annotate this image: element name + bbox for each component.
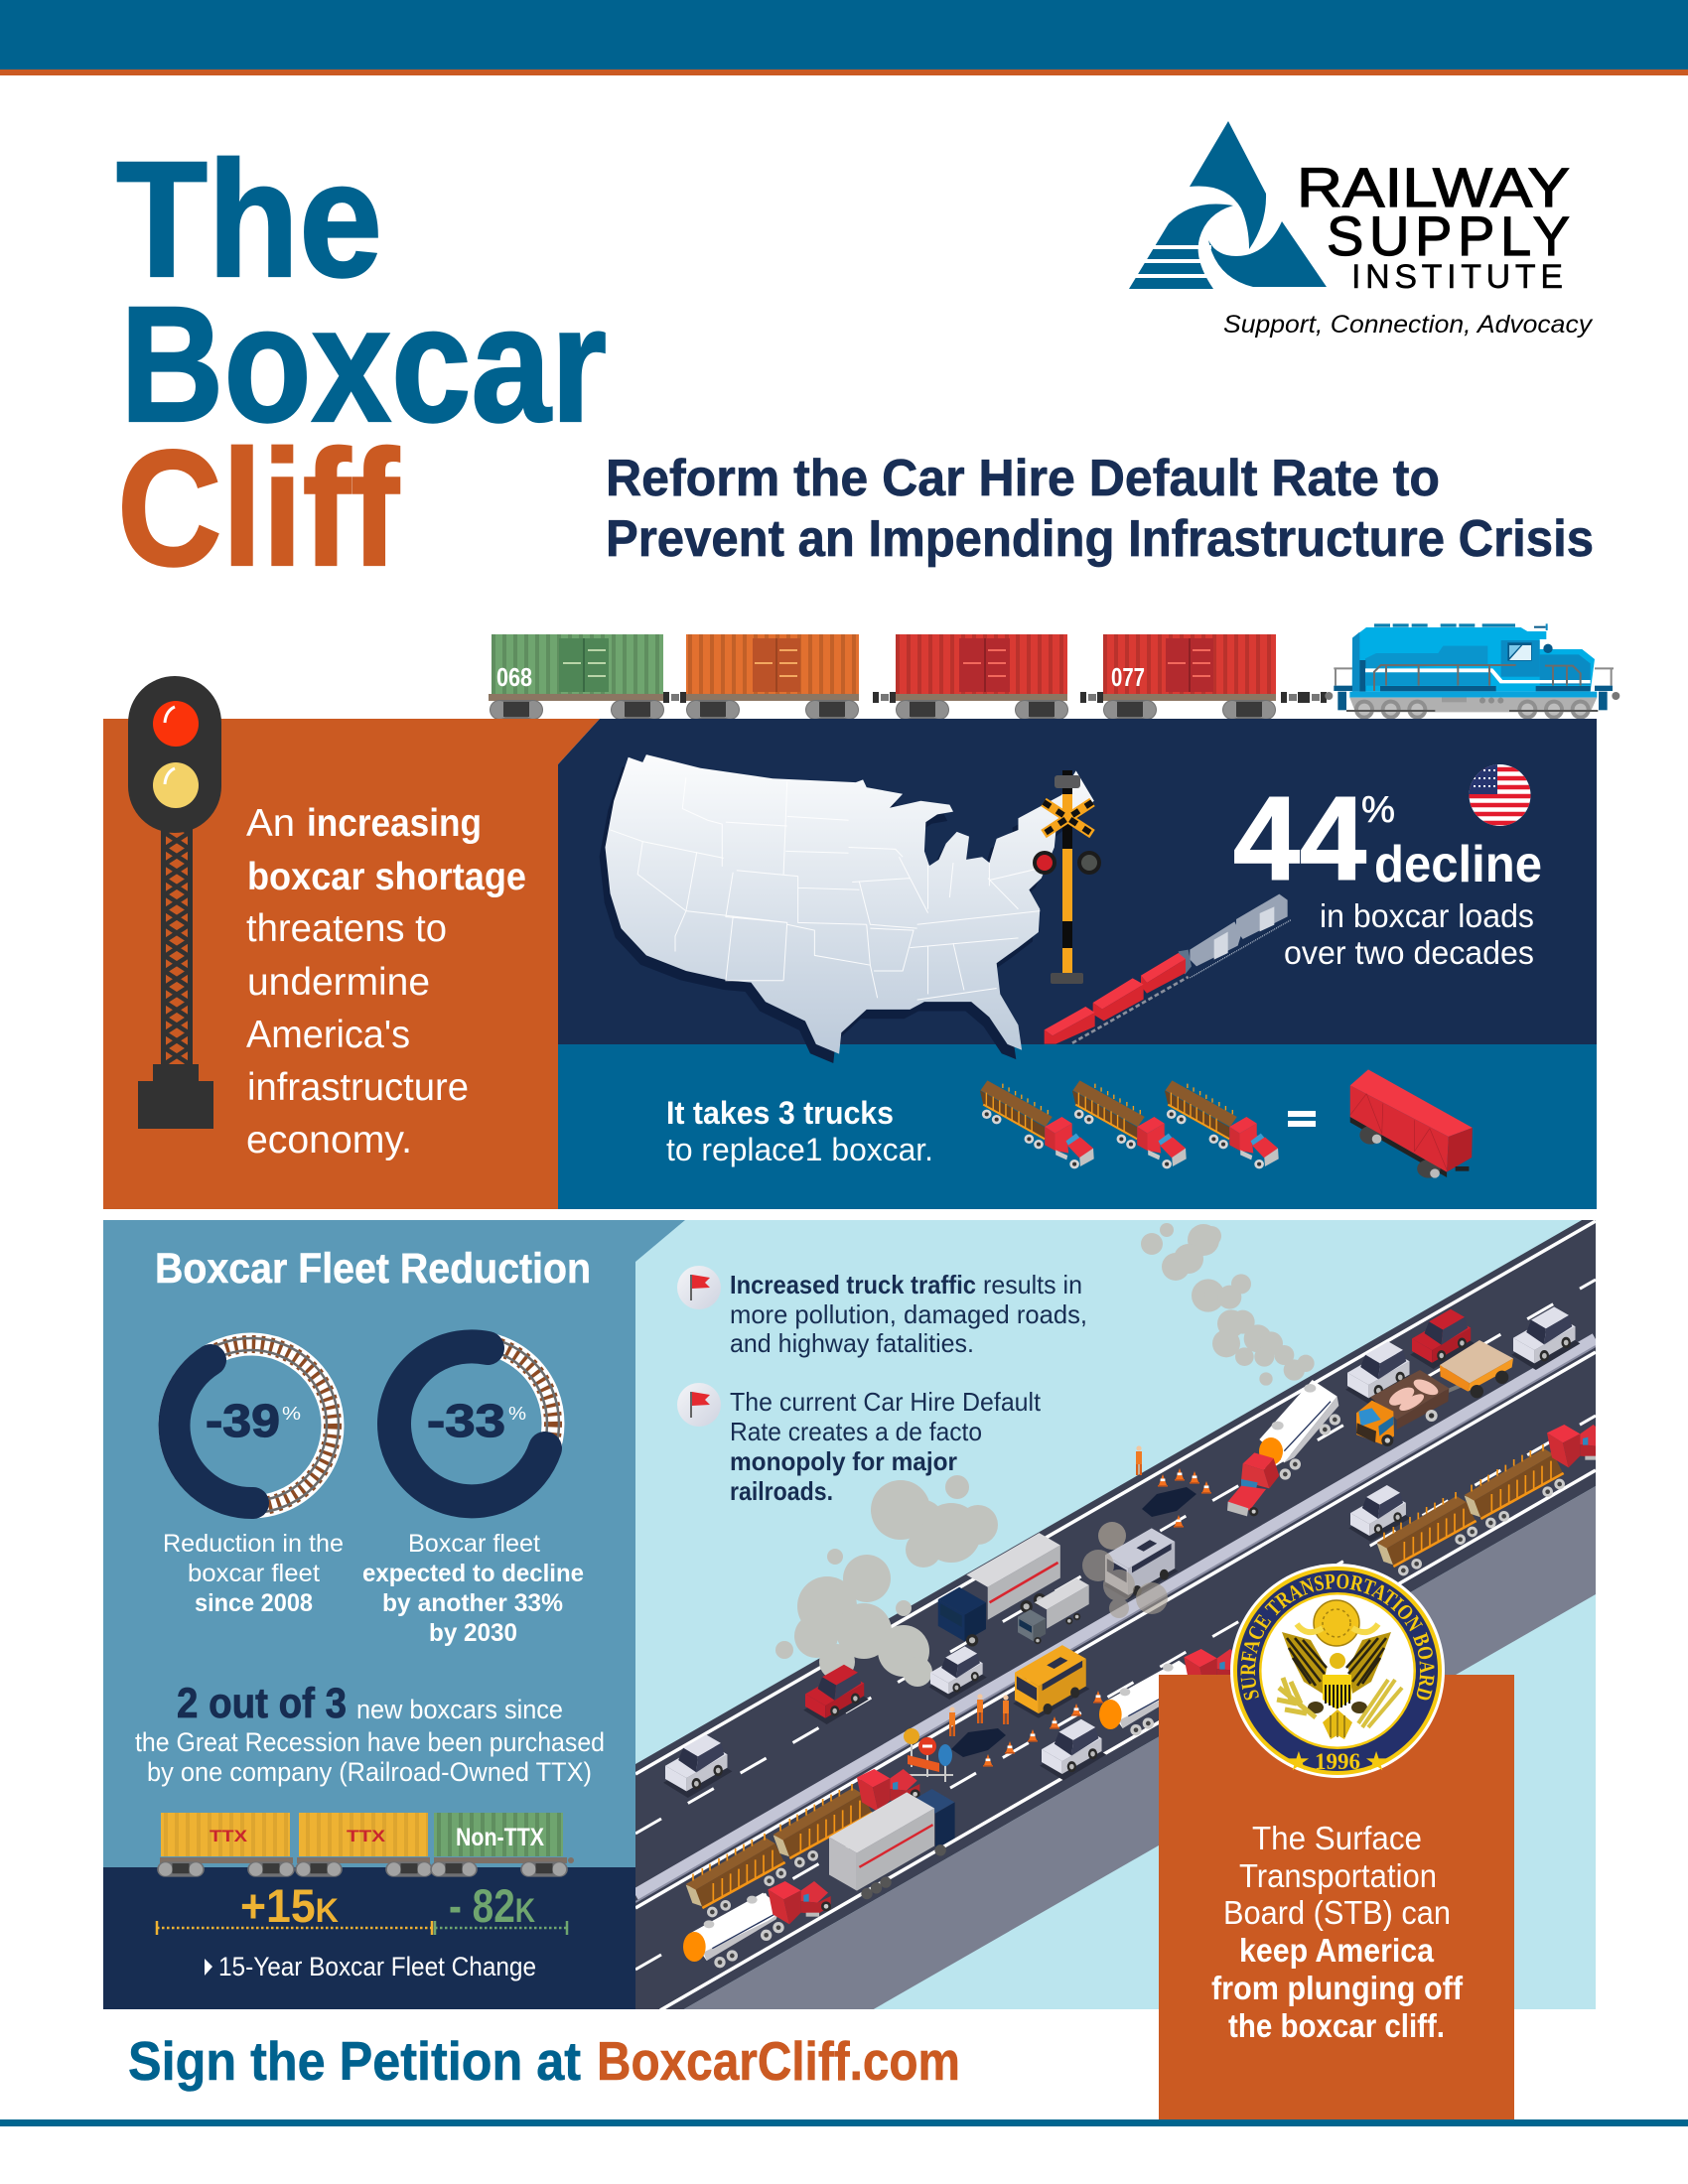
donut captions: boxcar fleet (188, 1560, 320, 1587)
text: STB statement: Board (STB) can (1223, 1894, 1451, 1931)
TTX car one: TTX (210, 1827, 248, 1845)
subtitle: Reform the Car Hire Default Rate to (606, 450, 1440, 507)
bullet: monopoly: The current Car Hire Default (730, 1387, 1042, 1417)
text: three trucks (666, 1095, 933, 1167)
pig truck and trailer (1356, 1340, 1513, 1446)
seal: Surface Transportation Board: ★ 1996 ★ (1289, 1749, 1387, 1774)
stat: 44% decline: in boxcar loads (1320, 897, 1534, 934)
road surface (635, 1212, 1596, 2010)
text: STB statement: keep America (1239, 1932, 1435, 1969)
text: STB statement: the boxcar cliff. (1228, 2007, 1445, 2044)
text: shortage statement: An (246, 802, 295, 845)
subtitle (606, 450, 1594, 568)
stat: 44% decline: over two decades (1284, 934, 1534, 971)
panel: blue truck comparison (558, 1044, 1597, 1209)
text: shortage statement: undermine (247, 961, 430, 1004)
bullet: monopoly: monopoly for major (730, 1446, 957, 1476)
equals sign (1288, 1111, 1316, 1127)
text: three trucks: It takes 3 trucks (666, 1095, 894, 1131)
title: The Boxcar Cliff (116, 128, 607, 601)
boxcar orange (686, 634, 859, 720)
title: The Boxcar Cliff: Cliff (117, 417, 400, 601)
seal: Surface Transportation Board: SURFACE TRANSPORTATION BOARD (1240, 1574, 1434, 1700)
donut captions: by 2030 (429, 1619, 517, 1647)
donut captions: expected to decline (362, 1560, 584, 1587)
logo wordmark: RAILWAY (1297, 156, 1570, 218)
subtitle: Prevent an Impending Infrastructure Crisis (606, 510, 1594, 568)
title: The Boxcar Cliff: The (116, 128, 382, 312)
seal: Surface Transportation Board (1230, 1564, 1445, 1778)
text: 2 out of 3: the Great Recession have been purchased (135, 1727, 605, 1757)
potholes (951, 1487, 1196, 1757)
panel: navy TTX strip (103, 1867, 635, 2009)
text: shortage statement: increasing (307, 802, 482, 845)
sky background (635, 1220, 1596, 2009)
panel: orange shortage panel (103, 676, 600, 1209)
couplers (663, 692, 1327, 703)
caption: 15-Year Boxcar Fleet Change: 15-Year Boxcar Fleet Change (218, 1952, 536, 1981)
call to action: sign the petition (128, 2030, 960, 2092)
stat: 44% decline: decline (1374, 836, 1542, 893)
stat: 44% decline: % (1361, 789, 1395, 830)
logo mark (1129, 121, 1327, 289)
text: shortage statement: economy. (246, 1119, 412, 1161)
bracket: green measure (435, 1921, 567, 1935)
text: 2 out of 3: by one company (Railroad-Owned TTX) (147, 1757, 592, 1787)
chart: -33% donut: % (508, 1404, 526, 1424)
chart: -39% donut: % (282, 1404, 301, 1424)
call to action: sign the petition: BoxcarCliff.com (597, 2030, 960, 2092)
locomotive (1325, 623, 1619, 720)
stat: +15K: +15K (240, 1879, 339, 1932)
cones and workers (949, 1445, 1211, 1767)
bullet: truck traffic: Increased truck traffic (730, 1270, 976, 1299)
bullet: monopoly: Rate creates a de facto (730, 1417, 982, 1446)
panel: Surface Transportation Board callout (1159, 1675, 1514, 2119)
boxcar red (896, 634, 1068, 720)
text: STB statement: from plunging off (1211, 1970, 1464, 2006)
icon: railway signal (128, 676, 221, 1129)
footer rule (0, 2119, 1688, 2126)
bullet: truck traffic: more pollution, damaged roads, (730, 1299, 1087, 1329)
boxcar 077: 077 (1111, 662, 1145, 692)
donut captions: by another 33% (382, 1589, 563, 1617)
Non-TTX car (430, 1813, 574, 1877)
panel: highway scene (635, 1212, 1611, 2010)
stat: 44% decline (1233, 772, 1542, 971)
logging rig lower left (686, 1769, 920, 1917)
stat: -82K: - 82K (449, 1879, 535, 1932)
panel: navy decline panel (558, 719, 1597, 1044)
chart: -39% donut: -39 (206, 1395, 280, 1446)
chart: -39% donut (164, 1338, 339, 1513)
mid tanker (1099, 1649, 1247, 1735)
icon: three log trucks (980, 1080, 1279, 1168)
heading: Boxcar Fleet Reduction: Boxcar Fleet Reduction (155, 1245, 591, 1293)
bullet: truck traffic (677, 1266, 1087, 1358)
header band (0, 0, 1688, 75)
donut captions: Reduction in the (163, 1530, 344, 1558)
logo: Railway Supply Institute (1129, 121, 1594, 339)
road signs (904, 1728, 953, 1782)
bullet: monopoly (677, 1383, 1042, 1506)
bracket: yellow measure (157, 1921, 432, 1935)
icon: flag (677, 1266, 721, 1309)
corner chamfer (635, 1220, 685, 1262)
bullet: truck traffic: results in (983, 1270, 1082, 1299)
upper tanker (1227, 1380, 1340, 1516)
bullet: monopoly: railroads. (730, 1476, 833, 1506)
TTX car two: TTX (347, 1827, 386, 1845)
TTX car one (157, 1813, 295, 1877)
chart: -33% donut (384, 1336, 559, 1511)
text: shortage statement (246, 802, 526, 1161)
text: shortage statement: threatens to (246, 907, 447, 950)
donut captions: Boxcar fleet (408, 1530, 540, 1558)
illustration: tiny train on diagonal (1045, 894, 1291, 1044)
icon: flag (677, 1383, 721, 1427)
Non-TTX car: Non-TTX (456, 1824, 544, 1851)
donut captions: since 2008 (195, 1589, 313, 1617)
rear box trailer with navy cab (829, 1789, 955, 1899)
bullet: truck traffic: and highway fatalities. (730, 1328, 974, 1358)
call to action: sign the petition: Sign the Petition at (128, 2030, 581, 2092)
TTX car two (295, 1813, 433, 1877)
yellow van (1013, 1645, 1089, 1718)
text: three trucks: to replace1 boxcar. (666, 1132, 933, 1167)
tagline: Support, Connection, Advocacy (1223, 311, 1594, 339)
boxcar 068: 068 (496, 662, 532, 692)
icon: US flag (1469, 764, 1531, 826)
text: shortage statement: America's (246, 1014, 410, 1056)
text: 2 out of 3: 2 out of 3 (177, 1680, 347, 1727)
chart: -33% donut: -33 (427, 1395, 505, 1446)
map of the United States (600, 754, 1094, 1063)
icon: red boxcar (1350, 1069, 1473, 1178)
train on top of panels (489, 623, 1619, 720)
illustration: TTX and Non-TTX cars (157, 1813, 574, 1877)
text: STB statement (1211, 1820, 1464, 2044)
text: shortage statement: boxcar shortage (247, 856, 526, 898)
title: The Boxcar Cliff: Boxcar (120, 273, 607, 457)
text: STB statement: Transportation (1239, 1857, 1437, 1894)
panel: steel-blue fleet panel background (103, 1220, 635, 2009)
stat: 44% decline: 44 (1233, 772, 1366, 905)
lower tanker (683, 1881, 831, 1968)
exhaust haze on road (1082, 1550, 1168, 1618)
logging rig right (1377, 1425, 1611, 1575)
eagle (1277, 1600, 1402, 1739)
text: 2 out of 3 (135, 1680, 605, 1787)
smoke clouds in sky (775, 1223, 1315, 1687)
boxcar 077 (1103, 634, 1276, 720)
text: 2 out of 3: new boxcars since (356, 1695, 563, 1724)
logo wordmark: INSTITUTE (1351, 258, 1563, 296)
logo wordmark: SUPPLY (1327, 205, 1570, 267)
text: shortage statement: infrastructure (247, 1066, 469, 1109)
logo wordmark (1297, 156, 1570, 296)
van smoke (1098, 1522, 1126, 1550)
donut captions (163, 1530, 584, 1647)
boxcar 068 (489, 634, 664, 720)
vehicles: upper carriageway (663, 1306, 1580, 1798)
icon: crossing signal (1033, 770, 1101, 984)
text: STB statement: The Surface (1252, 1820, 1422, 1856)
